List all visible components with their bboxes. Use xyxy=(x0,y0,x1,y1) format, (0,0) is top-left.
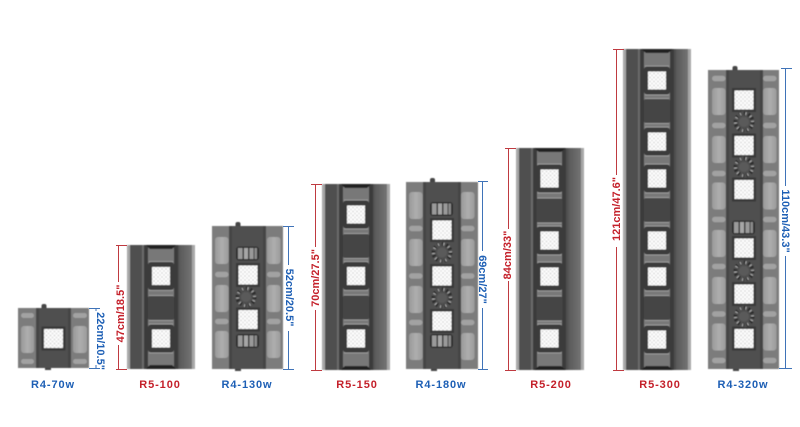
lamp: R5-200 xyxy=(516,148,584,370)
lamp: R4-320w xyxy=(708,66,779,371)
dimension: 110cm/43.3: 110cm/43.3" xyxy=(779,189,791,253)
dimension: 70cm/27.5 xyxy=(310,184,322,370)
lamp: R5-100 xyxy=(127,245,195,369)
side windows xyxy=(409,192,474,360)
dimension: 84cm/33: 84cm/33" xyxy=(502,231,514,279)
dark panels xyxy=(644,98,670,321)
dark panels xyxy=(343,233,369,320)
housing xyxy=(127,245,195,369)
label: R5-150: R5-150 xyxy=(336,379,378,391)
vent xyxy=(732,220,755,234)
label: R4-130w: R4-130w xyxy=(222,379,272,391)
label: R4-70w: R4-70w xyxy=(31,379,75,391)
fans xyxy=(431,242,453,309)
label: R5-300: R5-300 xyxy=(639,379,681,391)
dimension: 110cm/43.3 xyxy=(779,68,792,368)
housing xyxy=(406,182,478,369)
lamp: R4-70w xyxy=(18,304,89,370)
dimension: 121cm/47.6: 121cm/47.6" xyxy=(611,177,623,241)
housing xyxy=(708,70,779,369)
housing xyxy=(322,184,390,370)
LED modules xyxy=(536,164,562,354)
end caps xyxy=(146,245,176,249)
label: R4-180w: R4-180w xyxy=(416,379,466,391)
lamp: R5-150 xyxy=(322,184,390,370)
dimension: 70cm/27.5: 70cm/27.5" xyxy=(310,249,322,307)
LED modules xyxy=(148,261,174,354)
lamp: R4-180w xyxy=(406,178,478,371)
side windows xyxy=(21,313,34,318)
fan xyxy=(235,286,257,308)
LED modules xyxy=(732,88,756,350)
LED module xyxy=(42,326,66,350)
housing xyxy=(516,148,584,370)
dimension: 69cm/27 xyxy=(476,182,488,370)
mount knob xyxy=(42,304,46,310)
dimension: 22cm/10.5: 22cm/10.5" xyxy=(94,312,106,370)
housing xyxy=(623,49,691,370)
dimension: 69cm/27: 69cm/27" xyxy=(476,255,488,304)
dark panel xyxy=(148,295,174,321)
mount knob xyxy=(732,66,738,72)
dimension: 47cm/18.5: 47cm/18.5" xyxy=(115,285,127,342)
end caps xyxy=(534,148,566,152)
mount knob xyxy=(236,222,240,228)
side windows xyxy=(712,76,776,363)
end caps xyxy=(641,49,673,53)
end caps xyxy=(341,184,371,188)
label: R4-320w: R4-320w xyxy=(718,379,768,391)
vents xyxy=(430,202,453,348)
dimension: 47cm/18.5 xyxy=(115,246,127,370)
LED modules xyxy=(236,263,260,332)
dimension: 121cm/47.6 xyxy=(611,50,624,370)
mount knob xyxy=(430,178,435,184)
housing xyxy=(18,308,89,368)
dimension: 22cm/10.5 xyxy=(89,308,106,370)
side windows xyxy=(215,237,280,358)
housing xyxy=(212,226,283,369)
LED modules xyxy=(343,200,369,354)
LED modules xyxy=(430,218,454,333)
dark panels xyxy=(536,198,562,322)
vents xyxy=(236,246,259,348)
dimension: 84cm/33 xyxy=(502,148,516,370)
dimension: 52cm/20.5: 52cm/20.5" xyxy=(283,269,295,326)
label: R5-200: R5-200 xyxy=(530,379,572,391)
LED modules xyxy=(644,66,670,354)
lamp: R4-130w xyxy=(212,222,283,371)
dimension: 52cm/20.5 xyxy=(283,226,295,370)
label: R5-100: R5-100 xyxy=(139,379,181,391)
fans xyxy=(733,111,755,328)
lamp: R5-300 xyxy=(623,49,691,370)
